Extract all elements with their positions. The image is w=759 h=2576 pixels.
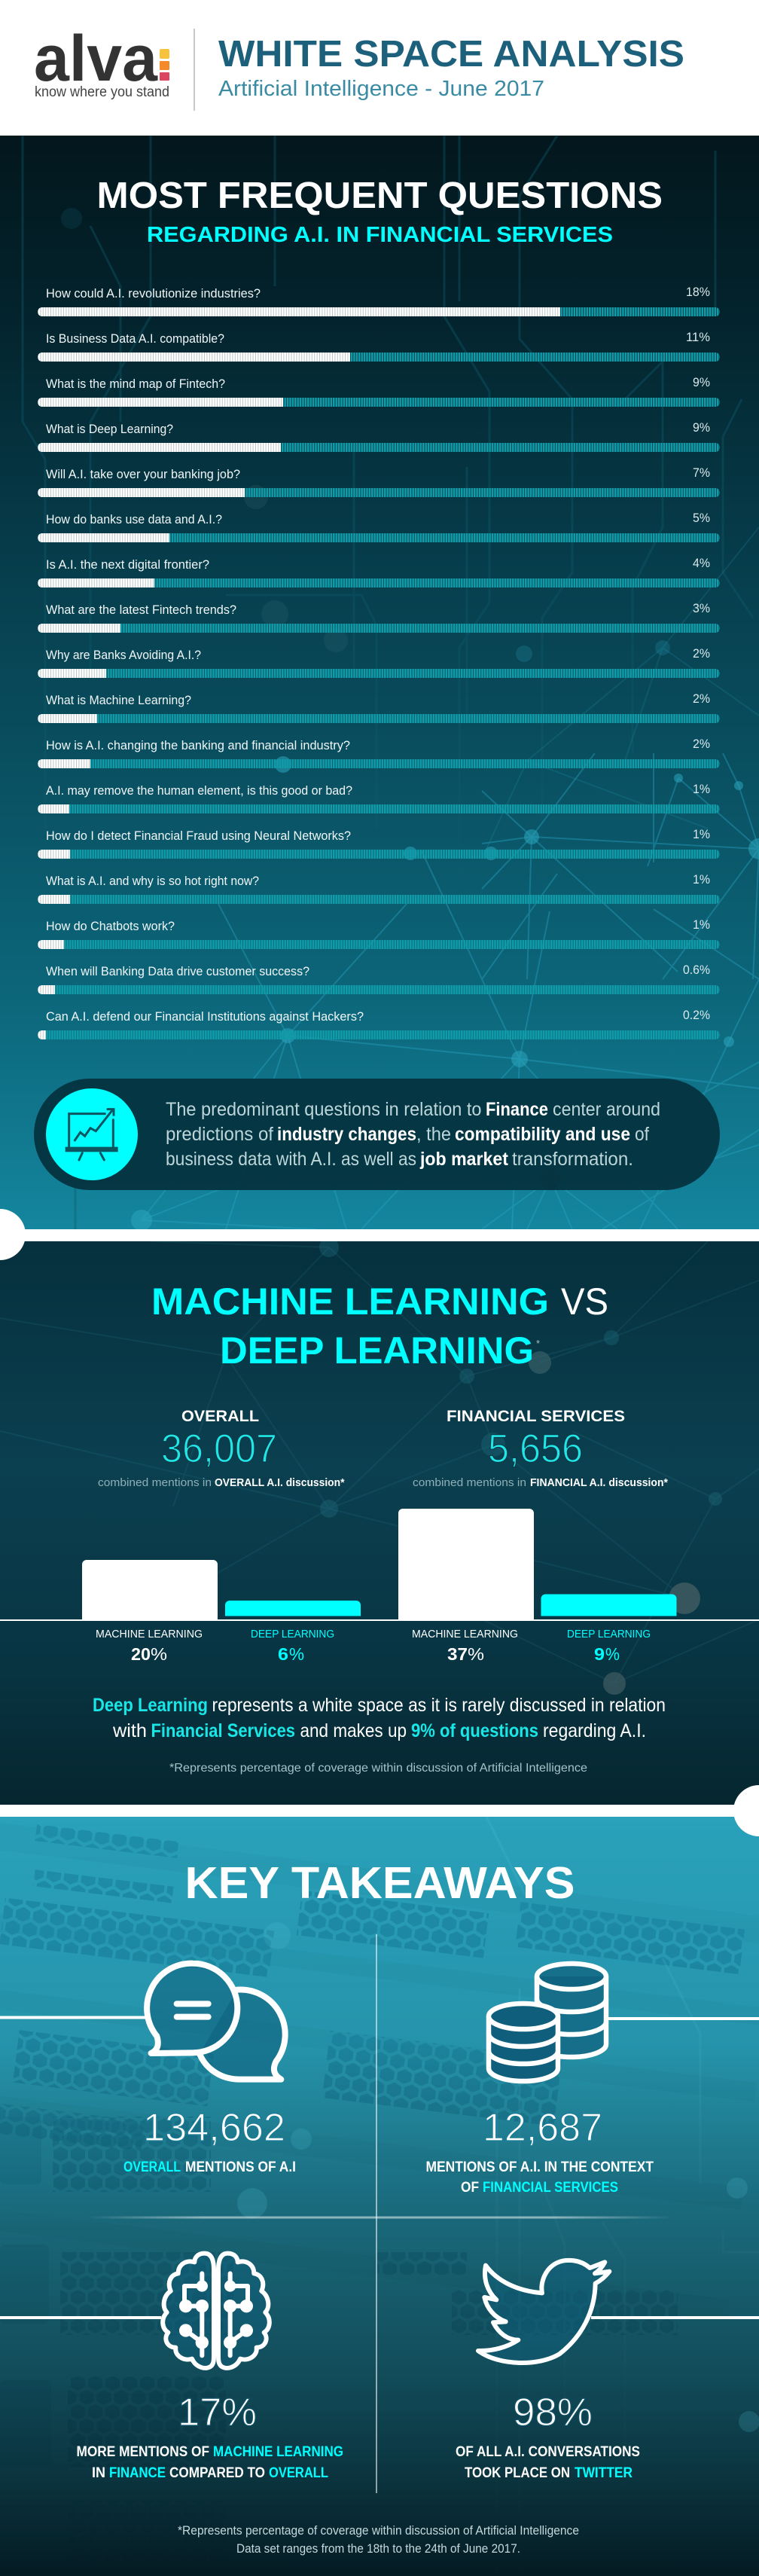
panel: key takeaways [0,1808,759,2576]
bar chart: machine vs deep learning: 6 [278,1644,288,1664]
text: white space summary: regarding A.I. [543,1720,646,1741]
bar chart: questions: Can A.I. defend our Financial Institutions against Hackers? [46,1009,364,1024]
icon: coin stacks [489,1964,606,2081]
bar chart: questions: 9% [693,420,710,435]
bar chart: questions: 1% [693,827,710,841]
bar chart: questions: 11% [686,330,710,344]
stat: financial services: combined mentions in [413,1476,526,1489]
caption: OVERALL [123,2159,181,2175]
icon: speech bubbles [147,1964,285,2080]
text: white space summary: Deep Learning [93,1695,208,1716]
panel: most frequent questions [0,136,759,1231]
callout text: The predominant questions in relation to [166,1099,482,1120]
bar chart: questions: What is A.I. and why is so hot right now? [46,874,259,888]
takeaway: overall mentions [123,1964,296,2175]
logo: alva: alva [34,23,158,95]
heading: machine learning vs deep learning [151,1280,608,1372]
subheading: REGARDING A.I. IN FINANCIAL SERVICES [147,223,613,247]
bar chart: machine vs deep learning [0,1509,759,1664]
caption [123,2159,296,2175]
bar chart: questions: 0.6% [683,963,710,977]
caption: MENTIONS OF A.I [185,2159,296,2175]
icon: presentation chart [46,1088,138,1180]
callout text: job market [419,1149,509,1170]
number: 17% [178,2391,257,2434]
bar chart: machine vs deep learning: 37 [447,1644,468,1664]
bar chart: questions: 4% [693,556,710,570]
footnote [178,2523,579,2556]
caption: OF ALL A.I. CONVERSATIONS [456,2444,640,2460]
bar chart: questions: 2% [693,691,710,706]
bar chart: questions: What is Machine Learning? [46,693,191,707]
callout: predominant questions [34,1079,720,1190]
bar chart: questions: 1% [693,782,710,796]
subtitle: Artificial Intelligence - June 2017 [218,77,544,101]
callout text: industry changes [277,1124,416,1145]
text: white space summary: Financial Services [151,1720,295,1741]
heading: machine learning vs deep learning: VS [561,1280,608,1323]
bar chart: questions: 7% [693,465,710,480]
heading: key takeaways: KEY TAKEAWAYS [185,1858,575,1908]
caption: OF [461,2180,479,2196]
bar chart: questions: Will A.I. take over your banking job? [46,467,240,481]
bar chart: questions: 2% [693,646,710,661]
takeaway: machine learning in finance [77,2254,343,2481]
bar chart: machine vs deep learning: DEEP LEARNING [567,1628,651,1641]
text: white space summary: and makes up [300,1720,407,1741]
bar chart: questions: What is the mind map of Fintech? [46,377,225,391]
takeaway: financial services mentions [426,1964,654,2196]
bar chart: questions: A.I. may remove the human element, is this good or bad? [46,783,352,798]
bar chart: machine vs deep learning: % [605,1644,620,1664]
callout text: Finance [486,1099,548,1120]
bar chart: questions: 1% [693,872,710,887]
white divider bands [0,1209,759,1836]
callout text: center around [553,1099,660,1120]
text: white space summary [93,1695,666,1741]
header [0,0,759,136]
bar chart: machine vs deep learning: MACHINE LEARNING [412,1628,518,1641]
bar chart: questions: 1% [693,917,710,932]
takeaway: twitter share [456,2260,640,2481]
bar chart: questions: 18% [686,285,710,299]
bar chart: questions: Is A.I. the next digital frontier? [46,557,209,572]
heading: machine learning vs deep learning: DEEP LEARNING [220,1329,534,1372]
bar chart: questions: How do I detect Financial Fraud using Neural Networks? [46,829,351,843]
callout text: transformation. [512,1149,633,1170]
callout text: , the [416,1124,451,1145]
panel: machine learning vs deep learning [0,1238,759,1805]
caption [77,2444,343,2481]
caption: IN [92,2465,105,2481]
bar chart: questions: Is Business Data A.I. compatible? [46,331,224,346]
footnote: Data set ranges from the 18th to the 24th of June 2017. [236,2541,520,2556]
bar chart: questions [38,285,720,1039]
bar chart: questions: When will Banking Data drive customer success? [46,964,309,978]
callout text [166,1099,660,1170]
bar chart: questions: 9% [693,375,710,389]
bar chart: machine vs deep learning: DEEP LEARNING [251,1628,334,1641]
stat: overall: OVERALL [181,1408,259,1425]
bar chart: questions: What are the latest Fintech trends? [46,603,236,617]
callout text: of [635,1124,649,1145]
callout text: business data with A.I. as well as [166,1149,416,1170]
bar chart: machine vs deep learning: % [468,1644,484,1664]
stat: financial services: 5,656 [488,1427,583,1471]
caption: OVERALL [269,2465,328,2481]
bar chart: questions: How do Chatbots work? [46,919,175,933]
callout text: compatibility and use [455,1124,630,1145]
logo: alva: know where you stand [35,84,169,100]
bar chart: machine vs deep learning: % [151,1644,167,1664]
number: 134,662 [143,2106,285,2150]
bar chart: questions: 3% [693,601,710,615]
bar chart: questions: How is A.I. changing the banking and financial industry? [46,738,350,752]
text: white space summary: 9% of questions [411,1720,538,1741]
bar chart: questions: 2% [693,737,710,751]
caption: TOOK PLACE ON [465,2465,570,2481]
footnote: *Represents percentage of coverage within discussion of Artificial Intelligence [178,2523,579,2538]
caption: TWITTER [575,2465,632,2481]
bar chart: machine vs deep learning: % [289,1644,304,1664]
stat: overall: 36,007 [161,1427,277,1471]
bar chart: questions: What is Deep Learning? [46,422,173,436]
heading: machine learning vs deep learning: MACHINE LEARNING [151,1280,549,1323]
caption: MORE MENTIONS OF [77,2444,209,2460]
heading: machine learning vs deep learning: * [536,1338,540,1349]
stat: overall: OVERALL A.I. discussion* [215,1476,345,1489]
stat: overall [98,1408,345,1489]
caption [426,2159,654,2196]
title: WHITE SPACE ANALYSIS [218,34,684,75]
bar chart: questions: 0.2% [683,1008,710,1022]
stat: financial services: FINANCIAL SERVICES [447,1408,625,1425]
bar chart: questions: 5% [693,511,710,525]
icon: brain circuit [163,2254,270,2368]
icon: twitter bird [478,2260,609,2363]
text: white space summary: with [112,1720,147,1741]
caption: FINANCIAL SERVICES [483,2180,618,2196]
heading: most frequent questions: MOST FREQUENT QUESTIONS [96,175,663,216]
caption: MACHINE LEARNING [213,2444,343,2460]
number: 98% [513,2391,593,2434]
bar chart: questions: How could A.I. revolutionize industries? [46,286,261,301]
callout text: predictions of [166,1124,273,1145]
bar chart: machine vs deep learning: MACHINE LEARNING [96,1628,203,1641]
caption: COMPARED TO [169,2465,265,2481]
bar chart: machine vs deep learning: 20 [131,1644,151,1664]
bar chart: machine vs deep learning: 9 [594,1644,605,1664]
caption: FINANCE [109,2465,166,2481]
caption: MENTIONS OF A.I. IN THE CONTEXT [426,2159,654,2175]
stat: financial services: FINANCIAL A.I. discussion* [530,1476,668,1489]
stat: overall: combined mentions in [98,1476,212,1489]
footnote: *Represents percentage of coverage within discussion of Artificial Intelligence [169,1762,587,1775]
caption [456,2444,640,2481]
text: white space summary: represents a white space as it is rarely discussed in relation [212,1695,666,1716]
number: 12,687 [483,2106,602,2150]
bar chart: questions: How do banks use data and A.I.? [46,512,222,526]
bar chart: questions: Why are Banks Avoiding A.I.? [46,648,201,662]
stat: financial services [413,1408,668,1489]
